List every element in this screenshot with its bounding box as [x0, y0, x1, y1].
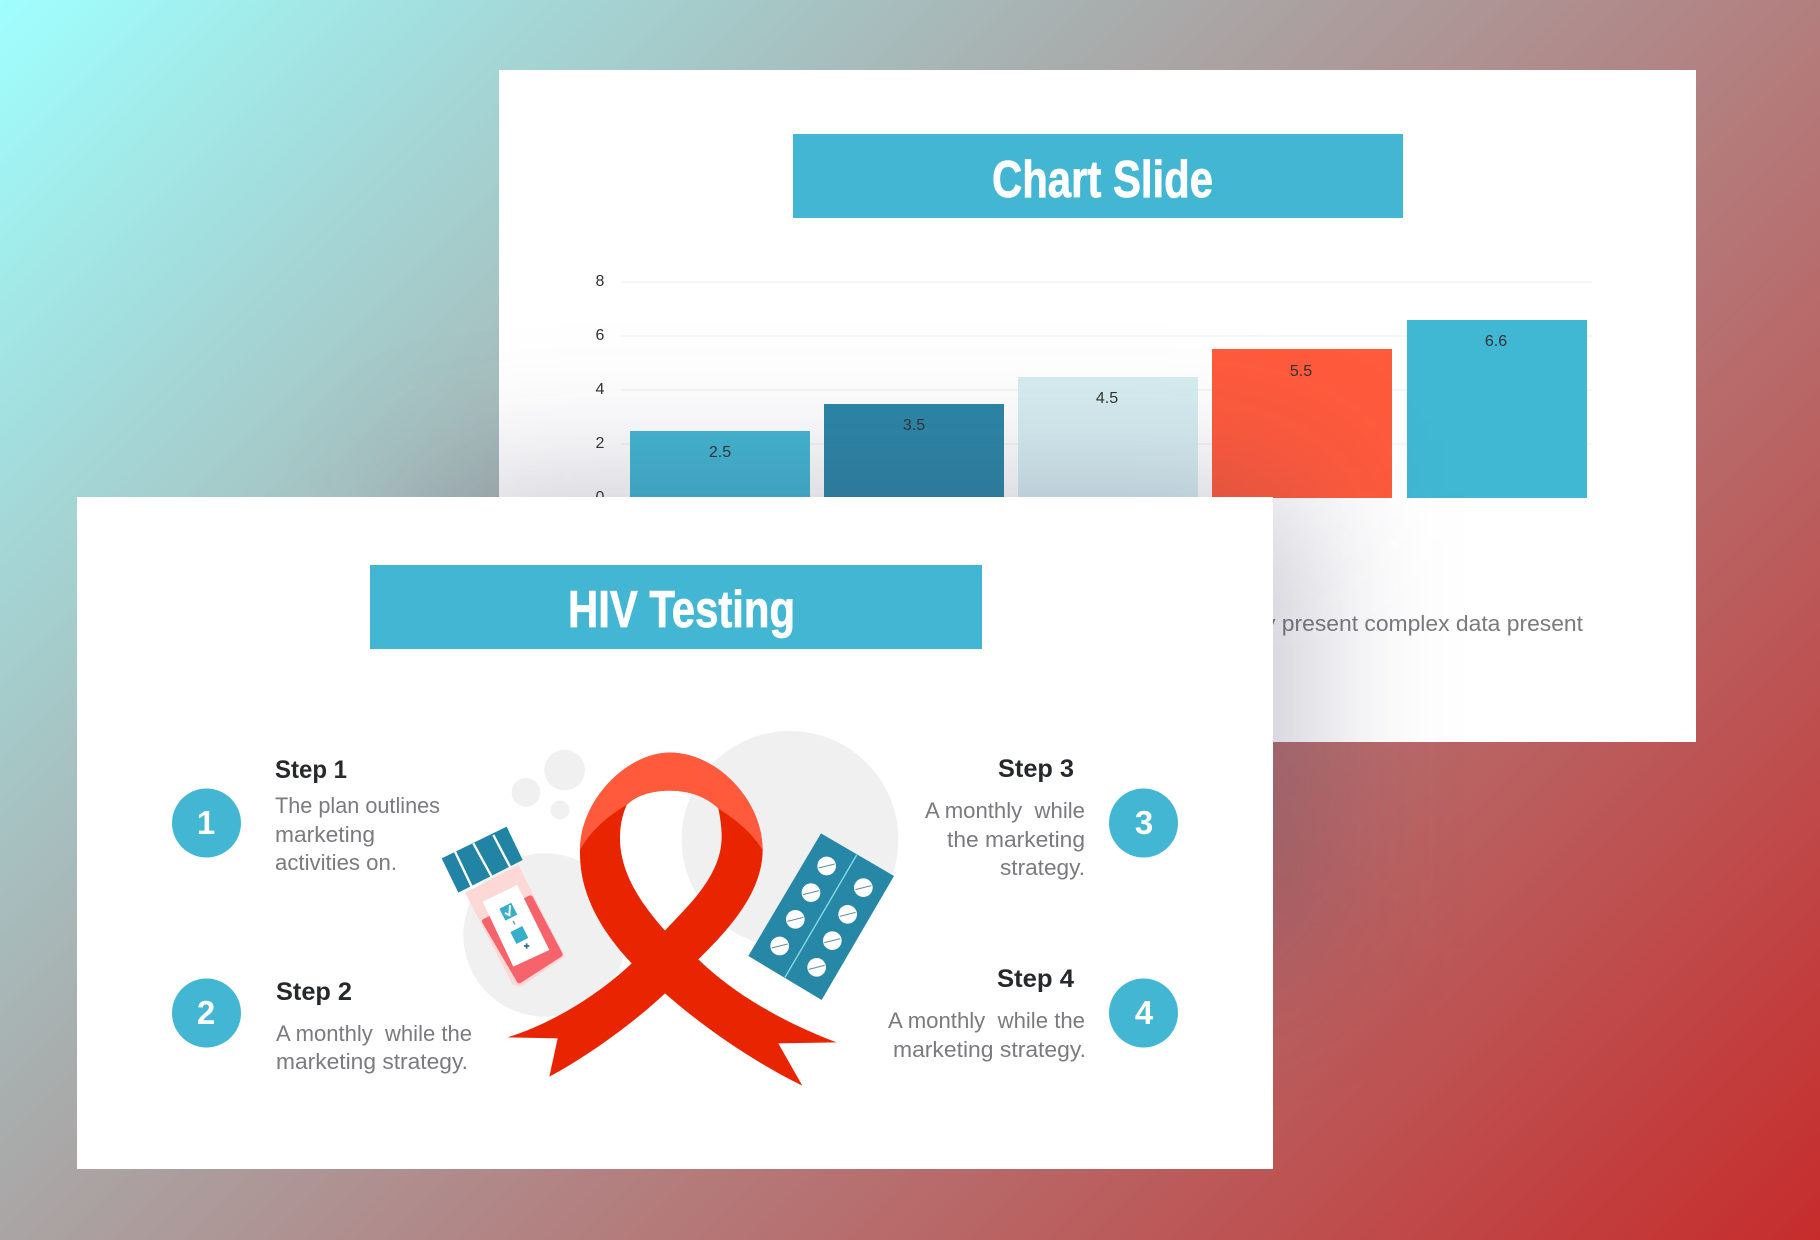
bar value labels: 3.5 — [903, 417, 925, 434]
step 3: Step 3 — [998, 755, 1074, 783]
step 4: Step 4 — [997, 965, 1074, 993]
bar value labels: 4.5 — [1096, 390, 1118, 407]
y axis labels: 4 — [596, 381, 605, 398]
step 3: the marketing — [947, 827, 1085, 852]
soft shadow cast up and right by the front slide — [430, 490, 1300, 950]
step 4: marketing strategy. — [893, 1037, 1086, 1062]
bar value labels: 6.6 — [1485, 333, 1507, 350]
step 1: marketing — [275, 822, 375, 847]
step 4: A monthly while the — [888, 1008, 1085, 1033]
y axis labels: 2 — [596, 435, 605, 452]
bar chart — [596, 273, 1592, 506]
step 4 — [888, 965, 1178, 1062]
panel: chart slide — [499, 70, 1696, 742]
step 3: 3 — [1135, 804, 1153, 841]
icon: bottle — [442, 827, 565, 987]
y axis labels: 0 — [596, 489, 605, 506]
illustration: ribbon with bottle and pills — [442, 731, 898, 1086]
step 4: 4 — [1135, 994, 1154, 1031]
bar value labels — [709, 333, 1507, 461]
panel: HIV testing — [77, 497, 1273, 1169]
heading: HIV Testing: HIV Testing — [568, 581, 795, 639]
step 3: A monthly while — [925, 798, 1085, 823]
step 1: Step 1 — [275, 756, 347, 784]
step 2 — [172, 978, 472, 1074]
heading: Chart Slide: Chart Slide — [992, 151, 1213, 209]
step 2: 2 — [197, 994, 215, 1031]
heading: HIV Testing — [370, 565, 982, 649]
step 3: strategy. — [1000, 855, 1085, 880]
step 1: 1 — [197, 804, 215, 841]
background circles — [463, 731, 898, 1017]
y axis labels: 8 — [596, 273, 605, 290]
bar value labels: 2.5 — [709, 444, 731, 461]
icon: red awareness ribbon — [507, 753, 837, 1086]
y axis labels: 6 — [596, 327, 605, 344]
bar value labels: 5.5 — [1290, 363, 1312, 380]
step 1 — [172, 756, 440, 875]
step 2: A monthly while the — [276, 1021, 472, 1046]
step 1: The plan outlines — [275, 793, 440, 818]
caption text: y present complex data present — [1264, 611, 1583, 636]
step 2: Step 2 — [276, 978, 352, 1006]
icon: pill blister pack — [748, 833, 894, 1000]
y axis labels — [596, 273, 605, 506]
step 3 — [925, 755, 1178, 880]
heading: Chart Slide — [793, 134, 1403, 218]
bars — [630, 320, 1587, 498]
step 1: activities on. — [275, 850, 397, 875]
step 2: marketing strategy. — [276, 1049, 468, 1074]
